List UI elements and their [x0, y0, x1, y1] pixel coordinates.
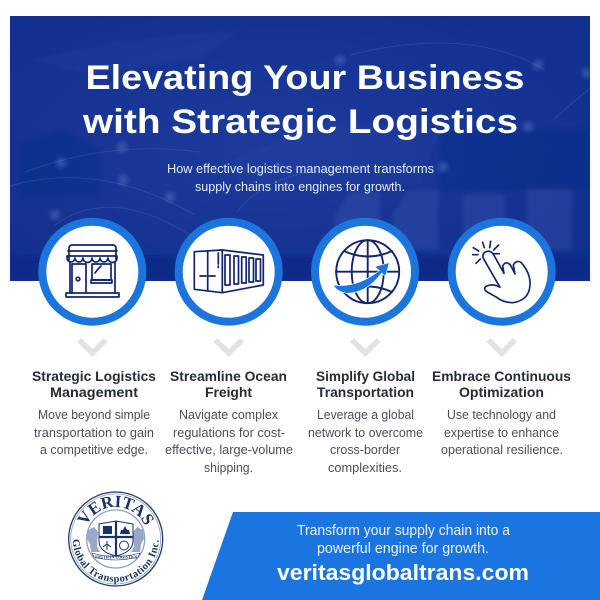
title [82, 59, 524, 141]
column: embrace continuous optimization: Use technology and [447, 408, 556, 422]
column: simplify global transportation: cross-border [330, 443, 400, 457]
column: embrace continuous optimization: Embrace Continuous [432, 369, 571, 384]
column: streamline ocean freight: Streamline Ocean [170, 369, 287, 384]
column: embrace continuous optimization: operational resilience. [441, 443, 563, 457]
column: streamline ocean freight: effective, large-volume [165, 443, 293, 457]
column: embrace continuous optimization: Optimization [459, 385, 544, 400]
title: with Strategic Logistics [82, 103, 518, 141]
footer call to action: veritasglobaltrans.com [277, 560, 529, 585]
column: simplify global transportation: complexities. [328, 461, 402, 475]
column: simplify global transportation: Leverage a global [317, 408, 414, 422]
column: strategic logistics management: Strategic Logistics [32, 369, 156, 384]
column: strategic logistics management: Move beyond simple [38, 408, 150, 422]
column: strategic logistics management: transportation to gain [34, 426, 154, 440]
lions [87, 527, 144, 552]
shield: TRUTH IN LOGISTICS [95, 554, 138, 560]
footer call to action [202, 512, 600, 600]
column: streamline ocean freight: regulations for cost- [173, 426, 285, 440]
column: streamline ocean freight: Freight [205, 385, 253, 400]
column: streamline ocean freight: shipping. [204, 461, 253, 475]
column: streamline ocean freight [165, 369, 293, 475]
column: simplify global transportation: Transportation [317, 385, 414, 400]
column: simplify global transportation [308, 369, 423, 475]
logo: Veritas seal [68, 491, 164, 587]
column: strategic logistics management: a competitive edge. [40, 443, 148, 457]
title: Elevating Your Business [86, 59, 524, 97]
column: embrace continuous optimization: expertise to enhance [444, 426, 559, 440]
column: streamline ocean freight: Navigate complex [179, 408, 279, 422]
icon: shipping container [179, 222, 279, 322]
footer call to action: Transform your supply chain into a [297, 523, 511, 539]
logo: Veritas seal: VERITAS [76, 496, 154, 524]
subtitle [167, 161, 434, 194]
subtitle: How effective logistics management transforms [167, 161, 434, 176]
column: strategic logistics management: Management [50, 385, 139, 400]
column: embrace continuous optimization [432, 369, 571, 457]
column: simplify global transportation: Simplify Global [316, 369, 415, 384]
subtitle: supply chains into engines for growth. [195, 179, 405, 194]
logo: Veritas seal: Global Transportation Inc. [72, 540, 159, 584]
column: simplify global transportation: network to overcome [308, 426, 423, 440]
icon: globe with arrow [315, 222, 415, 322]
panel: blue hero background [10, 16, 595, 281]
footer call to action: powerful engine for growth. [317, 541, 489, 557]
column: strategic logistics management [32, 369, 156, 457]
icon: storefront [42, 222, 142, 322]
icon: pointing hand [452, 222, 552, 322]
chevrons [79, 340, 515, 353]
